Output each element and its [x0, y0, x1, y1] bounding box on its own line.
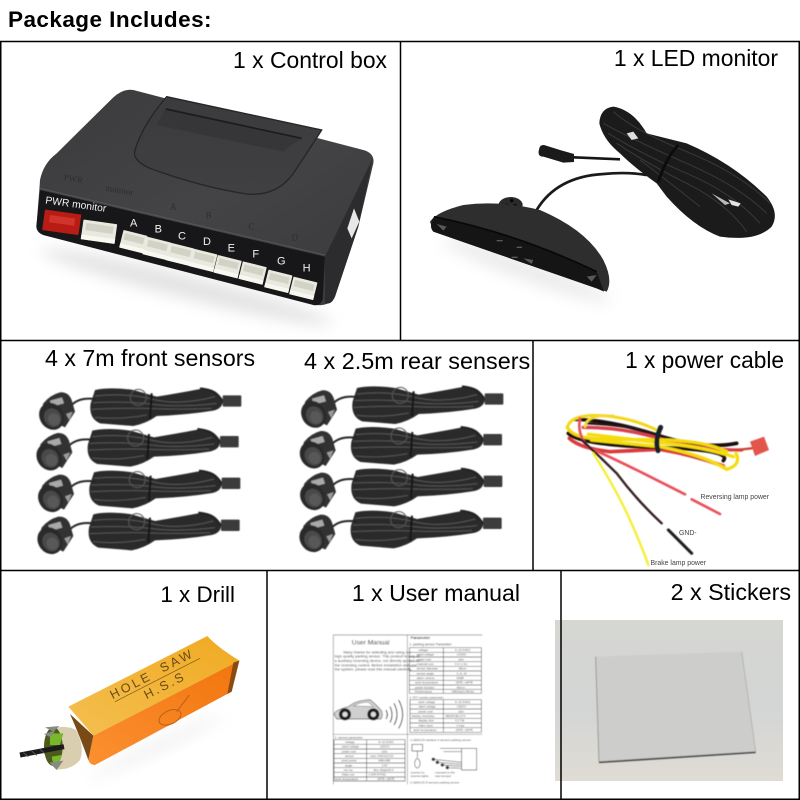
- icon: user manual sheet: 1 LED/LCD wireless 4 sensors parking sensor: [410, 738, 471, 742]
- icon: user manual sheet: sensor angle: [417, 671, 434, 675]
- icon: user manual sheet: material cost: [417, 662, 434, 666]
- icon: control box photo: monitor: [105, 183, 134, 198]
- icon: sticker sheet: [596, 652, 756, 762]
- icon: control box photo: B: [206, 210, 212, 220]
- panel: power cable: [567, 347, 784, 567]
- icon: hole saw box and drill bit: H.S.S: [142, 670, 186, 702]
- icon: user manual sheet: sensor: [345, 754, 354, 758]
- icon: control box photo: A: [130, 218, 138, 230]
- icon: user manual sheet: 170°: [382, 763, 389, 767]
- icon: user manual sheet: 2 LED/LCD 8 sensors parking sensor: [410, 780, 459, 784]
- icon: user manual sheet: [333, 635, 482, 784]
- icon: user manual sheet: 40mm: [457, 685, 465, 689]
- icon: user manual sheet: Video out: [342, 773, 354, 777]
- icon: control box photo: F: [252, 249, 259, 261]
- icon: user manual sheet: 480(RGB)×272: [445, 714, 466, 718]
- icon: user manual sheet: sensor diameter: [417, 667, 438, 671]
- white monitor connector: [81, 219, 117, 244]
- icon: user manual sheet: 60dB: [457, 676, 464, 680]
- icon: user manual sheet: the system, please read this manual carefully.: [335, 668, 412, 672]
- icon: user manual sheet: a auxiliary reversing device, not directly applied as: [335, 659, 420, 663]
- icon: user manual sheet: display resolution: [412, 714, 435, 718]
- icon: user manual sheet: power cost: [417, 657, 431, 661]
- icon: four rear sensors with cables: [294, 386, 503, 557]
- icon: user manual sheet: reverse lights: [411, 774, 429, 778]
- icon: user manual sheet: Many thanks for selecting and using our: [343, 650, 412, 654]
- saw body: [49, 727, 82, 769]
- icon: user manual sheet: Performance: [415, 690, 432, 694]
- icon: control box photo: A: [170, 202, 177, 212]
- icon: control box photo: C: [178, 230, 186, 242]
- icon: user manual sheet: 1.0VP-P/75Ω: [368, 773, 387, 777]
- icon: user manual sheet: 3. camera parameter:: [335, 735, 363, 739]
- label: control box: 1 x Control box: [233, 47, 388, 73]
- icon: hole saw box and drill bit: HOLE: [108, 670, 152, 702]
- cable label: reversing lamp power: Reversing lamp power: [700, 494, 770, 501]
- icon: hole saw box and drill bit: [20, 636, 239, 783]
- label: user manual: 1 x User manual: [352, 580, 520, 606]
- icon: user manual sheet: 9~15.5VDC: [378, 740, 395, 744]
- icon: user manual sheet: ≤2w: [458, 657, 465, 661]
- icon: control box photo: E: [228, 243, 235, 255]
- icon: user manual sheet: Parameter: [411, 635, 431, 640]
- title: Package Includes:: [8, 7, 212, 32]
- cable label: GND: GND-: [679, 530, 697, 537]
- icon: user manual sheet: 18mm: [458, 667, 467, 671]
- icon: control box photo: B: [155, 224, 162, 236]
- icon: user manual sheet: alarm volume: [417, 676, 435, 680]
- icon: user manual sheet: 2 way: [457, 723, 465, 727]
- icon: user manual sheet: pixel points: [342, 759, 357, 763]
- label: rear sensors: 4 x 2.5m rear sensers: [304, 348, 530, 374]
- icon: user manual sheet: 12VDC: [457, 653, 467, 657]
- icon: user manual sheet: -30℃~+80℃: [377, 777, 395, 781]
- icon: control box photo: D: [203, 236, 211, 248]
- icon: user manual sheet: video input: [418, 723, 433, 727]
- icon: control box photo: PWR monitor: [45, 195, 107, 215]
- icon: user manual sheet: mounted in the: [435, 771, 455, 775]
- icon: user manual sheet: work temperature: [413, 728, 437, 732]
- icon: user manual sheet: 12DCV: [457, 705, 466, 709]
- icon: user manual sheet: 4.3 TM: [455, 719, 465, 723]
- icon: user manual sheet: display size: [418, 719, 434, 723]
- icon: user manual sheet: power cost: [342, 749, 356, 753]
- icon: control box photo: H: [303, 263, 311, 275]
- icon: user manual sheet: min lux: [343, 768, 353, 772]
- panel: front sensors: [31, 345, 255, 559]
- icon: control box photo: [36, 90, 374, 335]
- car drawing: [334, 700, 403, 728]
- icon: control box photo: D: [292, 233, 299, 243]
- icon: user manual sheet: 12DCV: [380, 745, 390, 749]
- icon: user manual sheet: 9~15.5VDC: [455, 648, 471, 652]
- red power connector: [42, 210, 81, 235]
- icon: user manual sheet: power cost: [418, 709, 433, 713]
- photo background: [555, 620, 783, 781]
- icon: user manual sheet: color CMOS/CCD: [370, 754, 394, 758]
- panel: user manual: [333, 580, 520, 784]
- icon: user manual sheet: 1. parking sensor Parameter:: [409, 643, 452, 647]
- icon: user manual sheet: rated voltage: [417, 653, 434, 657]
- panel: control box: [36, 47, 388, 335]
- icon: user manual sheet: power function: [415, 685, 435, 689]
- panel: drill: [20, 582, 239, 783]
- icon: control box photo: C: [248, 221, 254, 231]
- icon: power cable bundle: [567, 415, 769, 565]
- icon: user manual sheet: -30℃~+80℃: [455, 681, 473, 685]
- icon: user manual sheet: voltage: [345, 740, 355, 744]
- icon: user manual sheet: work voltage: [418, 700, 435, 704]
- panel: LED monitor: [430, 45, 778, 310]
- panel: rear sensors: [294, 348, 530, 557]
- icon: user manual sheet: ≤2w: [382, 749, 388, 753]
- icon: user manual sheet: 40KHz(±1.0KHz): [452, 690, 474, 694]
- icon: user manual sheet: high quality parking sensor. This product is only as: [335, 655, 420, 659]
- icon: user manual sheet: 0lux (Night)/0.5: [373, 768, 394, 772]
- icon: LED monitor with coiled cable: [430, 107, 775, 310]
- icon: four front sensors with cables: [31, 388, 241, 559]
- icon: user manual sheet: -30℃~+80℃: [455, 728, 473, 732]
- icon: user manual sheet: 648×488: [378, 759, 390, 763]
- label: drill: 1 x Drill: [160, 582, 235, 607]
- icon: user manual sheet: 9~15.5VDC: [455, 700, 471, 704]
- icon: control box photo: G: [277, 256, 286, 268]
- icon: user manual sheet: voltage: [418, 648, 428, 652]
- icon: user manual sheet: work temperature: [335, 777, 359, 781]
- icon: user manual sheet: rear bumper: [435, 774, 451, 778]
- cable label: brake lamp power: Brake lamp power: [650, 560, 707, 567]
- label: LED monitor: 1 x LED monitor: [614, 45, 778, 71]
- icon: user manual sheet: ≤2w: [458, 709, 465, 713]
- icon: user manual sheet: 2. TFT monitor parameter:: [409, 695, 444, 699]
- icon: user manual sheet: User Manual: [352, 639, 390, 646]
- icon: user manual sheet: work temperature: [415, 681, 439, 685]
- label: stickers: 2 x Stickers: [671, 579, 791, 605]
- icon: user manual sheet: the reversing control. Before installation and use: [335, 663, 417, 667]
- icon: user manual sheet: rated voltage: [418, 705, 436, 709]
- icon: hole saw box and drill bit: SAW: [158, 647, 194, 675]
- label: front sensors: 4 x 7m front sensors: [45, 345, 255, 371]
- panel: stickers: [555, 579, 791, 781]
- icon: user manual sheet: 4, 8, 16: [457, 671, 467, 675]
- icon: user manual sheet: connect to: [411, 771, 425, 775]
- icon: user manual sheet: rated voltage: [342, 745, 359, 749]
- label: power cable: 1 x power cable: [625, 347, 784, 373]
- icon: user manual sheet: 0.3~1.5m: [455, 662, 468, 666]
- icon: user manual sheet: angle: [345, 763, 353, 767]
- icon: control box photo: PWR: [63, 172, 84, 185]
